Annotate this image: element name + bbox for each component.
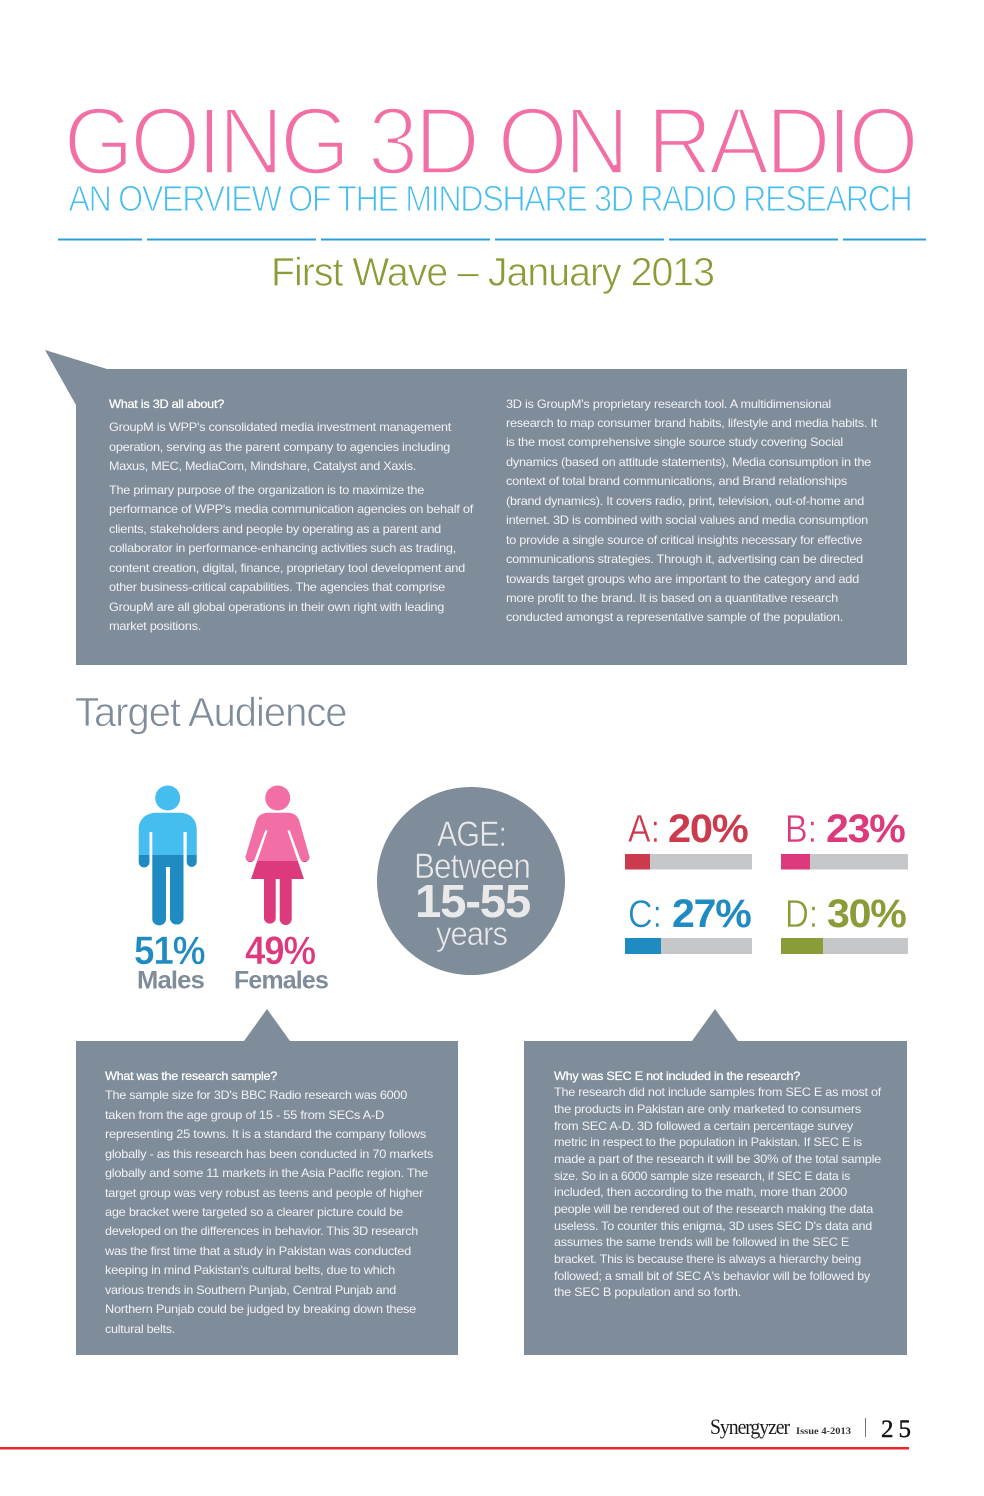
stat: SEC A: A:: [628, 808, 660, 851]
stat: SEC C: [625, 892, 752, 954]
footer: Issue 4-2013: [796, 1427, 851, 1437]
text: SEC E body: people will be rendered out of the research making the data: [554, 1202, 874, 1216]
text: left column: The primary purpose of the organization is to maximize the: [109, 483, 425, 497]
footer: Synergyzer: [710, 1414, 791, 1439]
stat: females: 49%: [245, 929, 316, 973]
callout: age circle: AGE:: [437, 815, 506, 854]
text: right column: [506, 397, 878, 624]
text: left column: collaborator in performance-enhancing activities such as trading,: [109, 541, 456, 555]
text: left column: GroupM are all global operations in their own right with leading: [109, 600, 444, 614]
text: research sample body: representing 25 towns. It is a standard the company follows: [105, 1127, 426, 1141]
stat: SEC D: D:: [785, 893, 818, 936]
text: research sample body: various trends in Southern Punjab, Central Punjab and: [105, 1283, 396, 1297]
text: SEC E body: the SEC B population and so forth.: [554, 1285, 741, 1299]
text: research sample body: globally - as this research has been conducted in 70 markets: [105, 1147, 433, 1161]
text: left column: other business-critical capabilities. The agencies that comprise: [109, 580, 446, 594]
text: SEC E body: Why was SEC E not included in the research?: [554, 1069, 801, 1083]
text: SEC E body: size. So in a 6000 sample size research, if SEC E data is: [554, 1169, 850, 1183]
text: right column: 3D is GroupM's proprietary research tool. A multidimensional: [506, 397, 831, 411]
text: research sample body: taken from the age group of 15 - 55 from SECs A-D: [105, 1108, 385, 1122]
stat: SEC D: 30%: [827, 892, 906, 936]
stat: SEC A: 20%: [668, 807, 748, 851]
text: right column: to provide a single source of critical insights necessary for effective: [506, 533, 863, 547]
text: research sample body: globally and some 11 markets in the Asia Pacific region. The: [105, 1166, 429, 1180]
stat: SEC B: 23%: [826, 807, 905, 851]
text: SEC E body: the products in Pakistan are only marketed to consumers: [554, 1102, 861, 1116]
stat: SEC B: B:: [785, 808, 817, 851]
stat: females: [234, 929, 328, 994]
callout: age circle: 15-55: [415, 875, 531, 927]
title: GOING 3D ON RADIO: [64, 88, 915, 195]
text: left column: Maxus, MEC, MediaCom, Mindshare, Catalyst and Xaxis.: [109, 459, 416, 473]
footer: 25: [881, 1416, 916, 1443]
text: right column: (brand dynamics). It covers radio, print, television, out-of-home and: [506, 494, 864, 508]
text: right column: dynamics (based on attitude statements), Media consumption in the: [506, 455, 872, 469]
text: research sample body: The sample size for 3D's BBC Radio research was 6000: [105, 1088, 408, 1102]
panel: what is 3D all about: [45, 350, 907, 665]
text: right column: is the most comprehensive single source study covering Social: [506, 435, 843, 449]
text: right column: context of total brand communications, and Brand relationships: [506, 474, 847, 488]
text: left column: operation, serving as the parent company to agencies including: [109, 440, 450, 454]
text: left column: clients, stakeholders and people by operating as a parent and: [109, 522, 441, 536]
text: research sample body: target group was very robust as teens and people of higher: [105, 1186, 423, 1200]
text: research sample body: [104, 1069, 433, 1336]
callout: age circle: years: [436, 915, 507, 952]
icon: female figure: [245, 786, 310, 925]
text: research sample body: Northern Punjab could be judged by breaking down these: [105, 1302, 417, 1316]
text: right column: conducted amongst a representative sample of the population.: [506, 610, 843, 624]
stat: SEC A: [625, 807, 752, 870]
text: left column: [109, 397, 474, 633]
text: SEC E body: included, then according to the math, more than 2000: [554, 1185, 848, 1199]
stat: females: Females: [234, 966, 328, 994]
text: left column: What is 3D all about?: [109, 397, 225, 411]
text: research sample body: developed on the differences in behavior. This 3D research: [105, 1224, 418, 1238]
stat: SEC B: [781, 807, 908, 870]
stat: SEC D: [781, 892, 908, 954]
text: left column: content creation, digital, finance, proprietary tool development and: [109, 561, 465, 575]
stat: males: Males: [137, 966, 204, 994]
text: left column: performance of WPP's media communication agencies on behalf of: [109, 502, 474, 516]
heading: target audience: Target Audience: [75, 689, 346, 735]
subtitle: AN OVERVIEW OF THE MINDSHARE 3D RADIO RESEARCH: [68, 178, 912, 219]
text: SEC E body: from SEC A-D. 3D followed a certain percentage survey: [554, 1119, 853, 1133]
text: SEC E body: bracket. This is because there is always a hierarchy being: [554, 1252, 861, 1266]
footer: [0, 1414, 916, 1450]
stat: males: [134, 929, 205, 994]
text: research sample body: keeping in mind Pakistan's cultural belts, due to which: [105, 1263, 395, 1277]
text: right column: towards target groups who are important to the category and add: [506, 572, 859, 586]
text: SEC E body: followed; a small bit of SEC A's behavior will be followed by: [554, 1269, 870, 1283]
text: research sample body: age bracket were targeted so a clearer picture could be: [105, 1205, 404, 1219]
panel: research sample: [76, 1009, 458, 1355]
text: SEC E body: made a part of the research it will be 30% of the total sample: [554, 1152, 882, 1166]
stat: SEC C: 27%: [672, 892, 751, 936]
text: SEC E body: metric in respect to the population in Pakistan. If SEC E is: [554, 1135, 862, 1149]
text: left column: market positions.: [109, 619, 201, 633]
text: research sample body: What was the research sample?: [105, 1069, 278, 1083]
callout: age circle: [377, 787, 565, 975]
text: research sample body: was the first time that a study in Pakistan was conducted: [104, 1244, 411, 1258]
text: right column: research to map consumer brand habits, lifestyle and media habits. It: [506, 416, 878, 430]
icon: male figure: [139, 786, 197, 925]
text: left column: GroupM is WPP's consolidated media investment management: [109, 420, 452, 434]
callout: age circle: Between: [414, 847, 530, 886]
stat: males: 51%: [134, 929, 205, 973]
text: SEC E body: useless. To counter this enigma, 3D uses SEC D's data and: [554, 1219, 872, 1233]
date heading: First Wave – January 2013: [271, 250, 714, 294]
text: right column: communications strategies. Through it, advertising can be directed: [506, 552, 863, 566]
text: SEC E body: assumes the same trends will be followed in the SEC E: [554, 1235, 849, 1249]
text: SEC E body: [554, 1069, 882, 1299]
text: right column: more profit to the brand. It is based on a quantitative research: [506, 591, 838, 605]
text: right column: internet. 3D is combined with social values and media consumption: [506, 513, 868, 527]
stat: SEC C: C:: [628, 893, 662, 936]
text: research sample body: cultural belts.: [105, 1322, 175, 1336]
panel: why SEC E was not included: [524, 1009, 907, 1355]
text: SEC E body: The research did not include samples from SEC E as most of: [554, 1085, 882, 1099]
